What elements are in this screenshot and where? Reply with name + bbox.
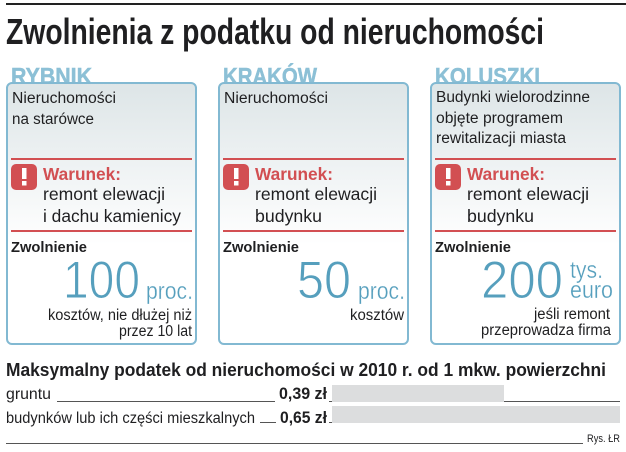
row: budynków: budynków lub ich części mieszkalnych: [6, 410, 255, 427]
row: gruntu: [6, 385, 620, 403]
exemption value: 50: [297, 251, 351, 310]
condition text: Warunek:: [43, 164, 121, 184]
panel: Kraków: [219, 62, 408, 344]
panel box: [431, 83, 620, 344]
property type text: objęte programem: [436, 110, 563, 127]
exemption note: [48, 307, 193, 340]
exemption label: Zwolnienie: [11, 239, 87, 256]
section heading: maximum tax: Maksymalny podatek od nieruchomości w 2010 r. od 1 mkw. powierzchni: [6, 359, 606, 380]
credit: Rys. ŁR: [587, 433, 620, 445]
property type text: Nieruchomości: [224, 90, 328, 107]
icon: warning: [435, 164, 461, 190]
condition text: budynku: [467, 206, 534, 226]
panel: Koluszki: [431, 63, 620, 344]
condition text: budynku: [255, 206, 322, 226]
property type text: rewitalizacji miasta: [436, 130, 566, 147]
condition text: remont elewacji: [255, 184, 377, 204]
panel box: [7, 83, 196, 344]
condition text: remont elewacji: [43, 184, 165, 204]
exemption note: jeśli remont: [533, 306, 611, 323]
condition text: remont elewacji: [467, 184, 589, 204]
panel: Koluszki: tys.: [570, 257, 603, 284]
property type text: Budynki wielorodzinne: [436, 89, 590, 106]
row: gruntu: 0,39 zł: [279, 385, 327, 403]
icon: warning: [223, 164, 249, 190]
exemption label: Zwolnienie: [223, 239, 299, 256]
exemption note: przez 10 lat: [119, 323, 193, 340]
exemption label: Zwolnienie: [435, 239, 511, 256]
exemption value: 100: [63, 251, 140, 310]
panel box: [219, 83, 408, 344]
property type text: [436, 89, 590, 147]
condition text: i dachu kamienicy: [43, 206, 181, 226]
row: gruntu: gruntu: [6, 386, 51, 403]
property type text: na starówce: [12, 111, 94, 128]
row: budynków: [6, 406, 620, 427]
panel: Koluszki: euro: [570, 277, 613, 304]
condition text: [255, 164, 377, 226]
city name: Koluszki: KOLUSZKI: [435, 63, 540, 89]
icon: warning: [11, 164, 37, 190]
exemption note: [481, 306, 611, 339]
panel: Kraków: proc.: [358, 278, 405, 305]
condition text: Warunek:: [467, 164, 545, 184]
condition text: [43, 164, 181, 226]
property type text: Nieruchomości: [12, 90, 116, 107]
city name: Rybnik: RYBNIK: [11, 63, 92, 89]
panel: Rybnik: [7, 63, 196, 344]
condition text: [467, 164, 589, 226]
exemption value: 200: [481, 251, 563, 310]
exemption note: przeprowadza firma: [481, 322, 611, 339]
property type text: [12, 90, 116, 128]
panel: Rybnik: proc.: [146, 278, 193, 305]
bar chart: maximum tax rates: [6, 385, 620, 427]
row: budynków: 0,65 zł: [280, 409, 327, 427]
exemption note: kosztów, nie dłużej niż: [48, 307, 192, 324]
condition text: Warunek:: [255, 164, 333, 184]
city name: Kraków: KRAKÓW: [223, 62, 318, 89]
exemption note: kosztów: [350, 307, 405, 324]
